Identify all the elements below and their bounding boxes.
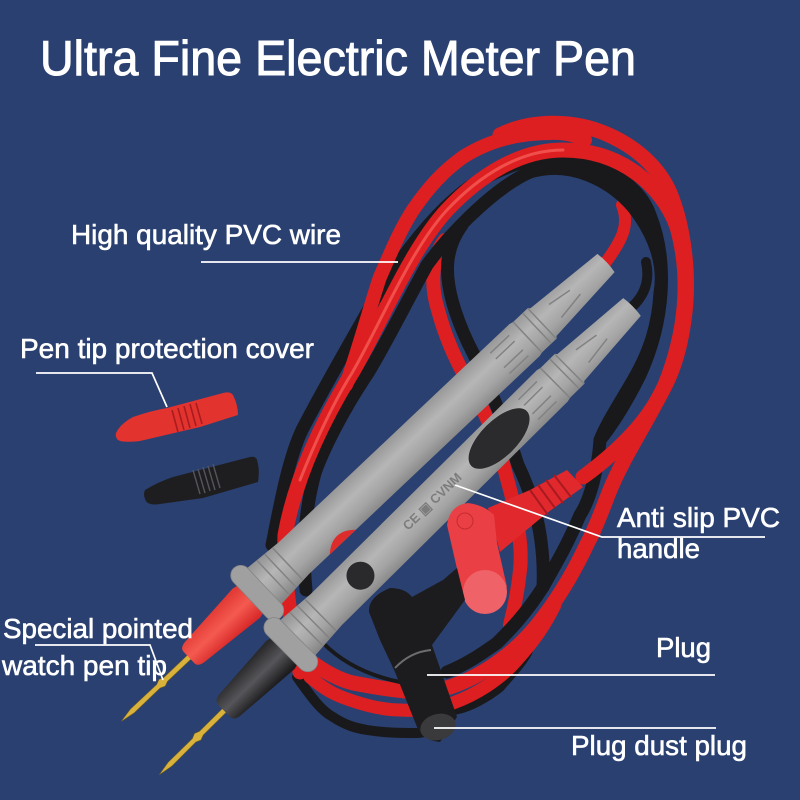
- red grip spot: [324, 524, 356, 555]
- black protection cover: [144, 457, 259, 504]
- label: high quality PVC wire: High quality PVC wire: [71, 219, 341, 250]
- label: pen tip protection cover: Pen tip protection cover: [20, 333, 314, 364]
- needle: [118, 651, 195, 725]
- red tip cone: [175, 582, 267, 672]
- pen 2: grey handle with black tip: [135, 282, 657, 799]
- pen 1: grey handle with red tip: [98, 238, 630, 746]
- label: anti slip PVC handle: handle: [617, 533, 700, 564]
- red angled plug: [447, 470, 583, 614]
- label: plug: Plug: [656, 632, 711, 663]
- collar: [260, 613, 322, 676]
- label: plug dust plug: Plug dust plug: [571, 730, 747, 761]
- wires: red and black PVC leads: [272, 123, 686, 733]
- black tip cone: [210, 635, 301, 725]
- label: special pointed watch pen tip: [1, 613, 193, 681]
- red protection cover: [116, 392, 238, 442]
- title: Ultra Fine Electric Meter Pen: [40, 32, 636, 86]
- black oval badge: [459, 398, 539, 479]
- small round badge: [341, 556, 380, 595]
- label: special pointed watch pen tip: Special pointed: [3, 613, 193, 644]
- needle: [156, 705, 230, 778]
- label: anti slip PVC handle: [455, 485, 780, 564]
- label: special pointed watch pen tip: watch pen tip: [1, 650, 167, 681]
- handle body: [279, 289, 650, 657]
- label: pen tip protection cover: [20, 333, 314, 407]
- ribs: [257, 273, 593, 595]
- label: anti slip PVC handle: Anti slip PVC: [617, 502, 780, 533]
- handle body: [246, 244, 624, 605]
- pen markings: CE ▣ CVNM: [400, 470, 465, 533]
- ribs: [290, 318, 620, 646]
- collar: [227, 561, 288, 624]
- black angled plug: [369, 568, 465, 744]
